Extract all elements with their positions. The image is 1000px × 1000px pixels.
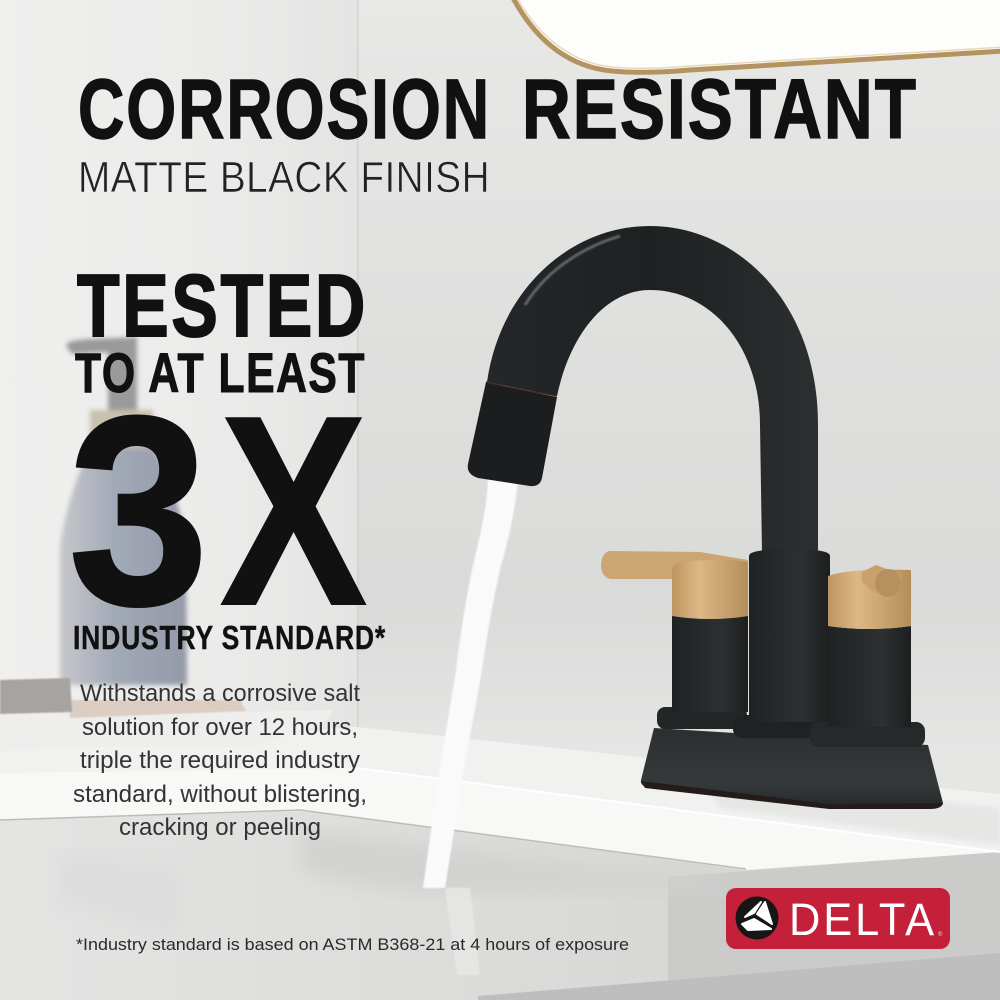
right knob lever [862,565,901,597]
letter X: X [220,361,368,662]
right body [828,626,911,727]
center flange [733,715,823,738]
claim: tested to at least 3X [68,256,386,662]
logo: Delta [726,888,950,949]
tube and tray on counter [0,678,332,747]
numeral 3: 3 [68,361,209,662]
spout highlight [525,236,620,305]
aerator head [468,382,557,486]
icon: delta triangle [736,896,778,940]
TESTED: TESTED [77,256,368,355]
body text: triple the required industry [80,747,360,774]
aerator seam [486,382,557,396]
left lever handle [601,551,748,580]
soap bottle in background [60,337,187,685]
body text: solution for over 12 hours, [82,714,358,741]
spout arc [487,226,818,552]
title [78,62,918,156]
title: CORROSION [78,62,491,156]
registered mark: ® [938,931,943,938]
body text: standard, without blistering, [73,781,367,808]
footnote: *Industry standard is based on ASTM B368-21 at 4 hours of exposure [76,936,629,954]
water stream [423,477,518,975]
TO AT LEAST: TO AT LEAST [75,341,366,404]
title: RESISTANT [522,62,918,156]
left flange [657,707,747,729]
body text: cracking or peeling [119,814,321,841]
mirror with gold frame [512,0,1000,72]
countertop and basin [0,727,1000,1000]
left body [672,616,748,712]
INDUSTRY STANDARD: INDUSTRY STANDARD* [73,619,386,656]
right gold cap [828,570,911,629]
subtitle: MATTE BLACK FINISH [78,153,490,202]
center column [749,549,830,722]
wordmark: DELTA [789,894,937,945]
left gold cap [672,559,748,619]
faucet [468,226,943,809]
right flange [810,722,925,747]
base plate [641,728,943,808]
body text [73,680,367,841]
body text: Withstands a corrosive salt [80,680,360,707]
